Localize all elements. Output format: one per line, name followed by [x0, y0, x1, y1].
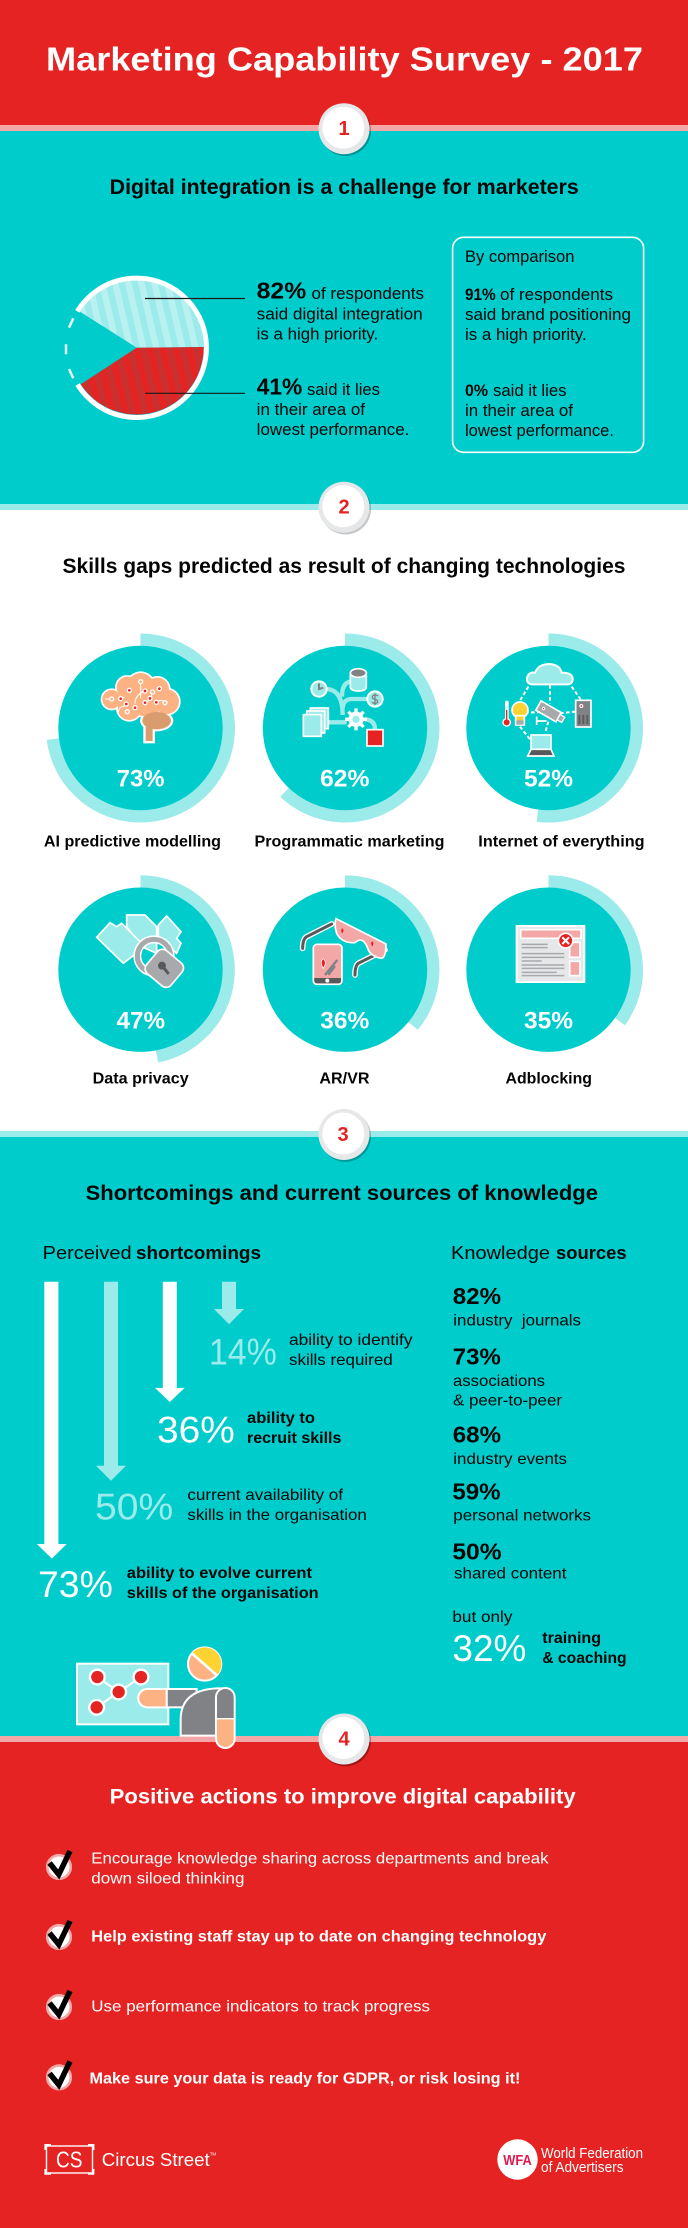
shortcoming 36%: 36%	[157, 1410, 235, 1450]
comparison box: said it lies	[493, 382, 566, 400]
comparison box: is a high priority.	[465, 326, 587, 344]
gauge: Internet of everything	[466, 634, 645, 851]
source 32% training: but only	[452, 1609, 512, 1626]
shortcoming 14%	[209, 1332, 412, 1373]
subheading: knowledge sources: Knowledge	[451, 1243, 550, 1263]
source 32% training: & coaching	[542, 1650, 627, 1667]
header panel	[0, 0, 688, 125]
action 2: Help existing staff stay up to date on changing technology	[91, 1928, 546, 1945]
badge 4	[318, 1714, 371, 1766]
source 59%: personal networks	[453, 1508, 591, 1525]
gauge: Programmatic marketing: Programmatic marketing	[254, 834, 444, 851]
panel: section 2 skills gaps	[0, 482, 688, 1131]
icon: documents and padlock	[97, 915, 186, 990]
icon: check	[47, 2061, 71, 2089]
gauge: Internet of everything: 52%	[524, 766, 573, 793]
comparison box: of respondents	[500, 286, 613, 304]
heading 4: Positive actions to improve digital capability	[110, 1785, 576, 1808]
gauge: Data privacy: Data privacy	[93, 1070, 189, 1087]
logo: Circus Street: CS	[56, 2147, 82, 2173]
badge 4: 4	[338, 1728, 350, 1750]
subheading: perceived shortcomings: Perceived	[43, 1243, 132, 1263]
arrow 73%	[37, 1282, 67, 1559]
logo: WFA	[497, 2139, 643, 2180]
source 82%	[453, 1283, 581, 1330]
illustration: person presenting at board	[77, 1647, 235, 1748]
gauge: Data privacy	[58, 875, 235, 1087]
logo: WFA: of Advertisers	[541, 2160, 624, 2176]
heading 3: Shortcomings and current sources of knowledge	[86, 1182, 598, 1205]
shortcoming 50%: current availability of	[187, 1487, 344, 1504]
gauge: AR/VR: AR/VR	[319, 1070, 370, 1087]
source 82%: 82%	[453, 1283, 501, 1309]
icon: check	[47, 1991, 71, 2019]
gauge: AI predictive modelling	[44, 634, 235, 851]
source 32% training: 32%	[452, 1628, 526, 1669]
gauge: Internet of everything: Internet of everything	[478, 834, 645, 851]
stat 82%: of respondents	[312, 285, 424, 303]
stat 41%: lowest performance.	[257, 421, 409, 439]
icon: network board	[77, 1664, 168, 1724]
panel: section 4 positive actions	[0, 1714, 688, 2228]
stat 82%: 82%	[257, 278, 306, 304]
heading 1: Digital integration is a challenge for marketers	[110, 176, 579, 199]
comparison box: 0%	[465, 381, 488, 400]
arrow 50%	[96, 1282, 126, 1481]
gauge: Adblocking	[466, 875, 643, 1087]
source 59%	[452, 1479, 591, 1525]
badge 3: 3	[337, 1124, 349, 1146]
logo: Circus Street: Circus Street	[102, 2149, 210, 2170]
badge 3	[318, 1109, 371, 1162]
shortcoming 73%	[38, 1564, 319, 1605]
gauge: Programmatic marketing: 62%	[320, 766, 370, 793]
action 4	[47, 2061, 520, 2089]
gauge: Programmatic marketing	[254, 634, 444, 851]
source 73%: associations	[453, 1373, 545, 1390]
stat 41%: said it lies	[307, 381, 380, 399]
icon: glasses and phone	[303, 919, 386, 984]
badge 1	[318, 103, 371, 156]
source 82%: industry journals	[453, 1313, 581, 1330]
icon: person	[138, 1647, 235, 1748]
action 1: Encourage knowledge sharing across departments and break	[91, 1850, 550, 1868]
source 73%: 73%	[453, 1343, 501, 1369]
title: Marketing Capability Survey - 2017	[46, 40, 643, 78]
icon: connected devices	[502, 664, 591, 756]
badge 2: 2	[338, 497, 350, 519]
shortcoming 50%: 50%	[95, 1486, 173, 1527]
icon: check	[47, 1851, 71, 1879]
gauge: AR/VR: 36%	[320, 1007, 369, 1034]
badge 1: 1	[338, 118, 350, 140]
shortcoming 36%: ability to	[247, 1410, 315, 1427]
arrow 36%	[155, 1282, 185, 1402]
action 3	[47, 1991, 430, 2019]
comparison box	[453, 237, 644, 452]
comparison box: in their area of	[465, 402, 573, 420]
shortcoming 36%	[157, 1410, 341, 1450]
icon: blocked advert page	[517, 926, 584, 982]
shortcoming 73%: 73%	[38, 1564, 113, 1605]
subheading: perceived shortcomings: shortcomings	[136, 1243, 261, 1263]
badge 2	[318, 482, 371, 534]
shortcoming 73%: skills of the organisation	[127, 1585, 319, 1602]
action 1: down siloed thinking	[91, 1870, 244, 1887]
shortcoming 73%: ability to evolve current	[127, 1565, 312, 1582]
shortcoming 36%: recruit skills	[247, 1430, 341, 1447]
subheading: perceived shortcomings	[43, 1243, 261, 1263]
source 32% training	[452, 1609, 627, 1669]
source 50%: 50%	[452, 1538, 502, 1564]
logo: Circus Street	[46, 2145, 216, 2174]
icon: brain	[101, 671, 181, 743]
heading 2: Skills gaps predicted as result of changing technologies	[62, 555, 626, 578]
action 2	[47, 1921, 546, 1949]
icon: programmatic network	[303, 669, 383, 746]
gauge: AR/VR	[263, 875, 439, 1087]
comparison box: said brand positioning	[465, 306, 631, 324]
stat 82%: is a high priority.	[257, 326, 378, 344]
panel: section 3 shortcomings	[0, 1109, 688, 1736]
source 50%: shared content	[454, 1566, 567, 1583]
source 68%: industry events	[453, 1451, 567, 1468]
shortcoming 50%	[95, 1486, 367, 1527]
logo: WFA: WFA	[503, 2152, 532, 2169]
subheading: knowledge sources: sources	[556, 1243, 627, 1263]
action 1	[47, 1850, 550, 1887]
arrow 14%	[214, 1282, 244, 1324]
source 32% training: training	[542, 1630, 601, 1647]
gauge: Adblocking: 35%	[524, 1007, 573, 1034]
stat 41%: 41%	[257, 374, 302, 400]
gauge: Data privacy: 47%	[116, 1007, 165, 1034]
source 59%: 59%	[452, 1479, 501, 1505]
shortcoming 14%: ability to identify	[289, 1332, 412, 1349]
source 73%	[453, 1343, 563, 1410]
gauge: AI predictive modelling: 73%	[117, 766, 164, 793]
shortcoming 14%: 14%	[209, 1332, 277, 1373]
icon: check	[47, 1921, 71, 1949]
action 4: Make sure your data is ready for GDPR, or risk losing it!	[90, 2071, 520, 2088]
action 3: Use performance indicators to track progress	[91, 1998, 430, 2015]
stat 41%	[257, 374, 409, 439]
stat 82%: said digital integration	[257, 306, 423, 324]
source 68%	[453, 1422, 567, 1468]
stat 82%	[257, 278, 424, 344]
source 50%	[452, 1538, 567, 1583]
gauge: AI predictive modelling: AI predictive modelling	[44, 834, 221, 851]
comparison box: 91%	[465, 285, 496, 304]
panel: section 1 digital integration	[0, 103, 688, 504]
source 68%: 68%	[453, 1422, 501, 1448]
comparison box: lowest performance.	[465, 422, 614, 440]
pie chart	[66, 278, 245, 417]
shortcoming 50%: skills in the organisation	[187, 1507, 367, 1524]
source 73%: & peer-to-peer	[453, 1393, 563, 1410]
comparison box: By comparison	[465, 248, 574, 266]
gauge: Adblocking: Adblocking	[506, 1070, 592, 1087]
stat 41%: in their area of	[257, 401, 365, 419]
shortcoming 14%: skills required	[289, 1352, 393, 1369]
logo: Circus Street: TM	[210, 2152, 216, 2156]
subheading: knowledge sources	[451, 1243, 627, 1263]
logo: WFA: World Federation	[541, 2146, 643, 2162]
